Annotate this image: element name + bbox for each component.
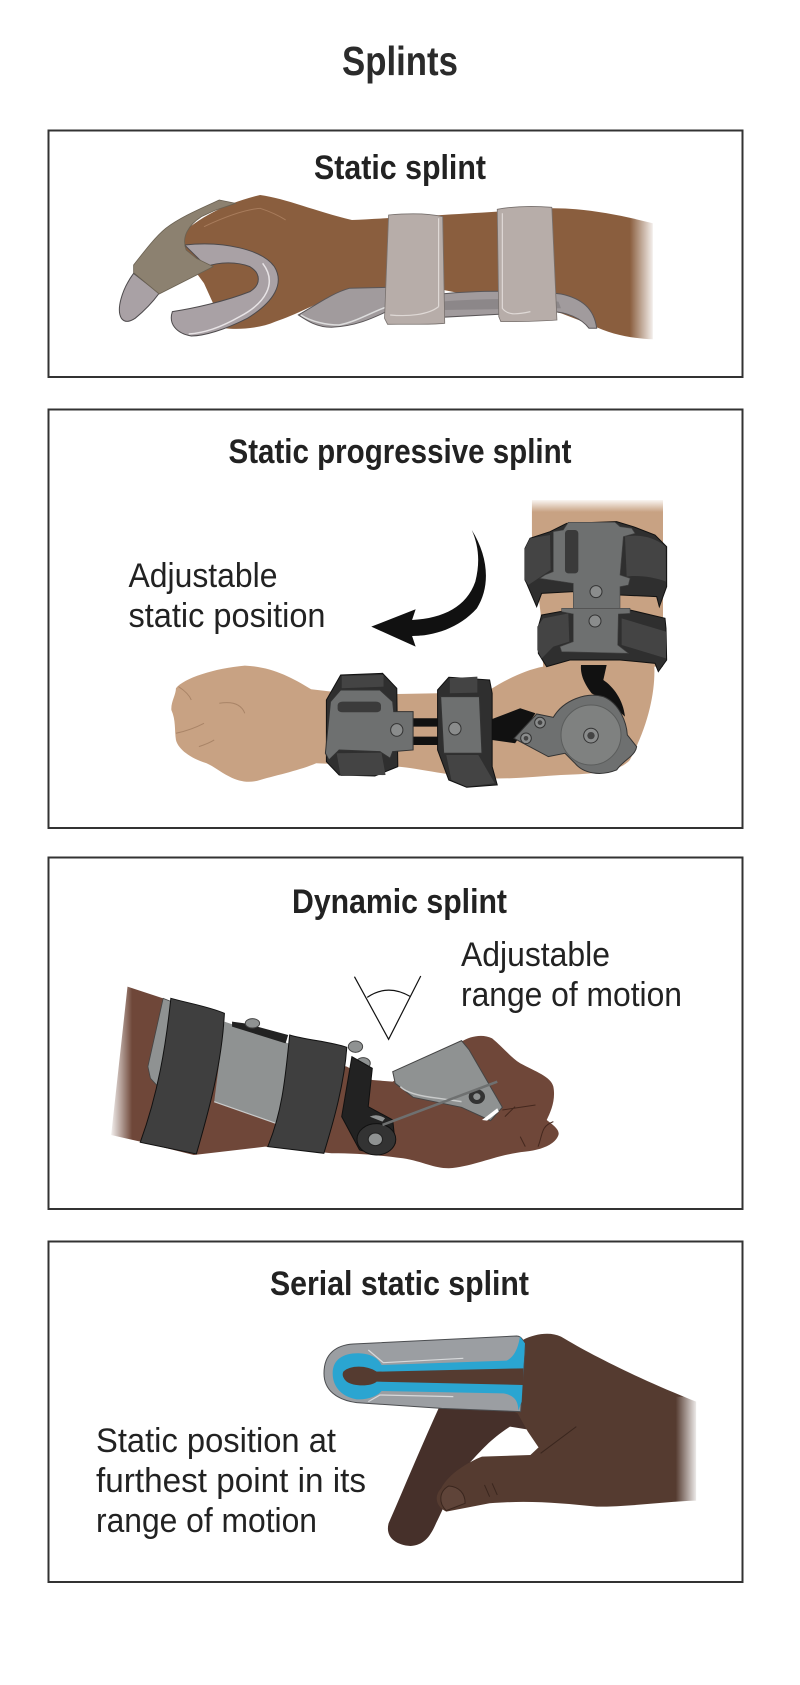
label: static position at furthest point: Static position at (96, 1422, 337, 1460)
gray plates (148, 998, 176, 1087)
label: adjustable static position (128, 557, 326, 635)
lower cuff (538, 610, 667, 672)
label: static position at furthest point: furthest point in its (96, 1462, 366, 1500)
arrow: flexion direction (371, 530, 486, 647)
hand body (437, 1334, 696, 1512)
strut (581, 665, 625, 717)
index finger (388, 1408, 541, 1546)
title: Splints (342, 38, 458, 84)
finger splint (324, 1336, 525, 1412)
heading: dynamic splint: Dynamic splint (292, 883, 507, 921)
illustration: hand (388, 1334, 699, 1546)
thumb wrap (134, 200, 236, 294)
black hinge arm (342, 1057, 395, 1155)
panel: static splint (48, 130, 742, 377)
splint shell (324, 1336, 525, 1412)
upper brace and hinge (514, 522, 667, 773)
thumb nail and creases (441, 1486, 465, 1511)
label: adjustable static position: Adjustable (128, 557, 278, 595)
blue foam lining (333, 1337, 525, 1411)
forearm cuff A (326, 673, 398, 776)
straps (140, 998, 224, 1154)
illustration: wrist splint on hand (119, 195, 655, 342)
black struts (413, 708, 536, 745)
hinge plate (514, 695, 637, 773)
illustration: elbow brace on arm (171, 499, 668, 787)
arm and fist (171, 500, 663, 782)
upper cuff (525, 522, 667, 607)
lower splint trough (298, 287, 597, 328)
label: adjustable range of motion (461, 936, 682, 1014)
icon: range of motion angle (354, 976, 421, 1039)
strap 2 (497, 206, 557, 322)
strap 1 (385, 214, 445, 324)
top rail and knobs (232, 1022, 288, 1043)
illustration: dynamic wrist splint (109, 983, 559, 1168)
label: adjustable range of motion: Adjustable (461, 936, 610, 974)
heading: serial static splint: Serial static splint (270, 1265, 529, 1303)
label: adjustable static position: static position (128, 597, 326, 635)
heading: static splint: Static splint (314, 149, 486, 187)
wheel and pull rod (357, 1124, 396, 1155)
panel: static progressive splint (48, 410, 742, 828)
palmar C piece (171, 244, 278, 336)
label: static position at furthest point (96, 1422, 366, 1540)
forearm cuff B (438, 677, 497, 787)
fingertip piece (119, 273, 159, 321)
label: static position at furthest point: range of motion (96, 1502, 317, 1540)
finger inside splint (343, 1367, 523, 1385)
panel: dynamic splint (48, 858, 742, 1209)
panel: serial static splint (48, 1242, 742, 1582)
heading: static progressive splint: Static progressive splint (228, 433, 572, 471)
label: adjustable range of motion: range of motion (461, 976, 682, 1014)
